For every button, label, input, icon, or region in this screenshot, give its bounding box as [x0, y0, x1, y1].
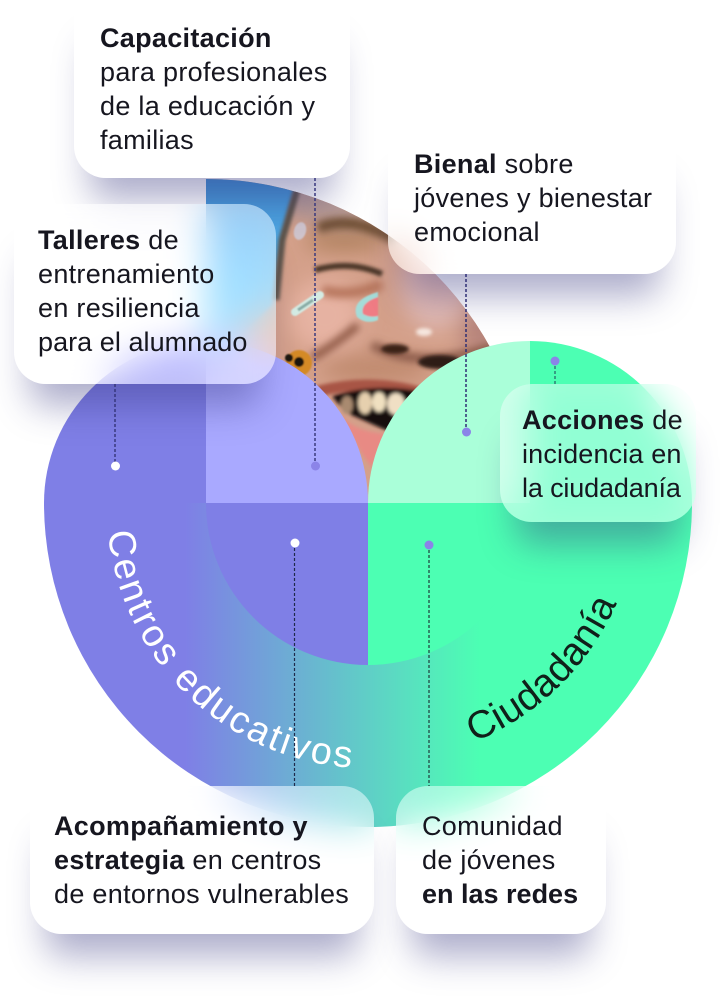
connector: Capacitación: [311, 178, 320, 470]
circular diagram: [44, 178, 696, 848]
photo: laughing young man with stickers on his face: [182, 179, 490, 502]
lower half disc with gradient ring: [44, 503, 692, 827]
eye: [315, 266, 382, 274]
connector: Acompañamiento: [290, 538, 300, 786]
upper left purple semicircle: [44, 341, 368, 503]
stickers: [285, 221, 378, 376]
card: Talleres: en resiliencia: [38, 293, 200, 323]
card: Acompañamiento: [30, 786, 374, 934]
card: Capacitación: para profesionales: [100, 57, 328, 87]
card: Talleres: para el alumnado: [38, 327, 247, 357]
card: Comunidad: Comunidad: [422, 811, 563, 841]
card: Comunidad: [396, 786, 606, 934]
card: Acciones: Acciones de: [522, 405, 683, 435]
card: Acciones: la ciudadanía: [522, 473, 681, 503]
connector: Acciones: [550, 356, 560, 384]
background sky: [200, 170, 300, 370]
card: Comunidad: de jóvenes: [422, 845, 556, 875]
card: Acompañamiento: Acompañamiento y: [54, 811, 308, 841]
card: Bienal: jóvenes y bienestar: [414, 183, 652, 213]
mouth: [316, 379, 425, 398]
card: Capacitación: de la educación y: [100, 91, 315, 121]
card: Capacitación: Capacitación: [100, 23, 272, 53]
connector: Talleres: [111, 384, 120, 470]
card: Talleres: [14, 204, 276, 384]
card: Talleres: entrenamiento: [38, 259, 215, 289]
card: Acompañamiento: de entornos vulnerables: [54, 879, 349, 909]
connector: Comunidad: [424, 540, 434, 786]
connector: Bienal: [462, 274, 471, 436]
card: Comunidad: en las redes: [422, 879, 578, 909]
card: Talleres: Talleres de: [38, 225, 179, 255]
lower inner semicircle: [206, 503, 530, 665]
card: Bienal: [388, 128, 676, 274]
card: Acciones: [500, 384, 696, 522]
card: Acciones: incidencia en: [522, 439, 682, 469]
card: Acompañamiento: estrategia en centros: [54, 845, 321, 875]
card: Capacitación: familias: [100, 125, 194, 155]
upper right green semicircle: [368, 341, 692, 503]
label: Centros educativos: Centros educativos: [109, 532, 351, 768]
label: Ciudadanía: Ciudadanía: [468, 599, 617, 738]
card: Bienal: Bienal sobre: [414, 149, 574, 179]
card: Bienal: emocional: [414, 217, 540, 247]
card: Capacitación: [74, 0, 350, 178]
nose: [381, 344, 409, 354]
